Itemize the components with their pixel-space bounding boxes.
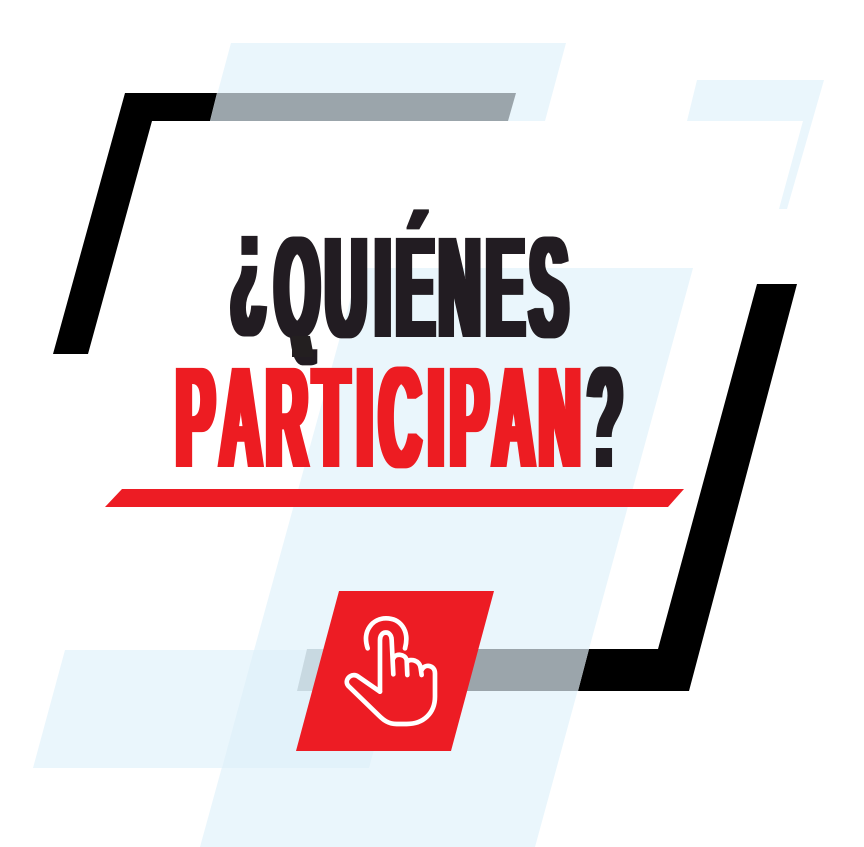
- heading: PARTICIPAN?: PARTICIPAN?: [176, 338, 623, 499]
- frame: top grey bar: [210, 93, 516, 121]
- panel: pale blue top parallelogram: [210, 43, 566, 121]
- panel: pale blue large central parallelogram: [200, 268, 693, 847]
- frame: bottom right black bracket: [578, 284, 797, 691]
- heading: ¿QUIÉNES: ¿QUIÉNES: [231, 183, 568, 369]
- panel: pale blue top right corner bracket: [687, 80, 824, 209]
- panel: overlap of pale blue shapes: [222, 650, 401, 768]
- frame: bottom grey bar: [320, 649, 589, 691]
- frame: bottom grey bar faded end: [297, 649, 340, 691]
- red button parallelogram: [296, 591, 494, 751]
- frame: top left black bracket: [53, 93, 217, 354]
- panel: pale blue bottom left parallelogram: [33, 650, 401, 768]
- icon: tapping hand: [347, 618, 435, 724]
- red underline bar: [105, 489, 684, 507]
